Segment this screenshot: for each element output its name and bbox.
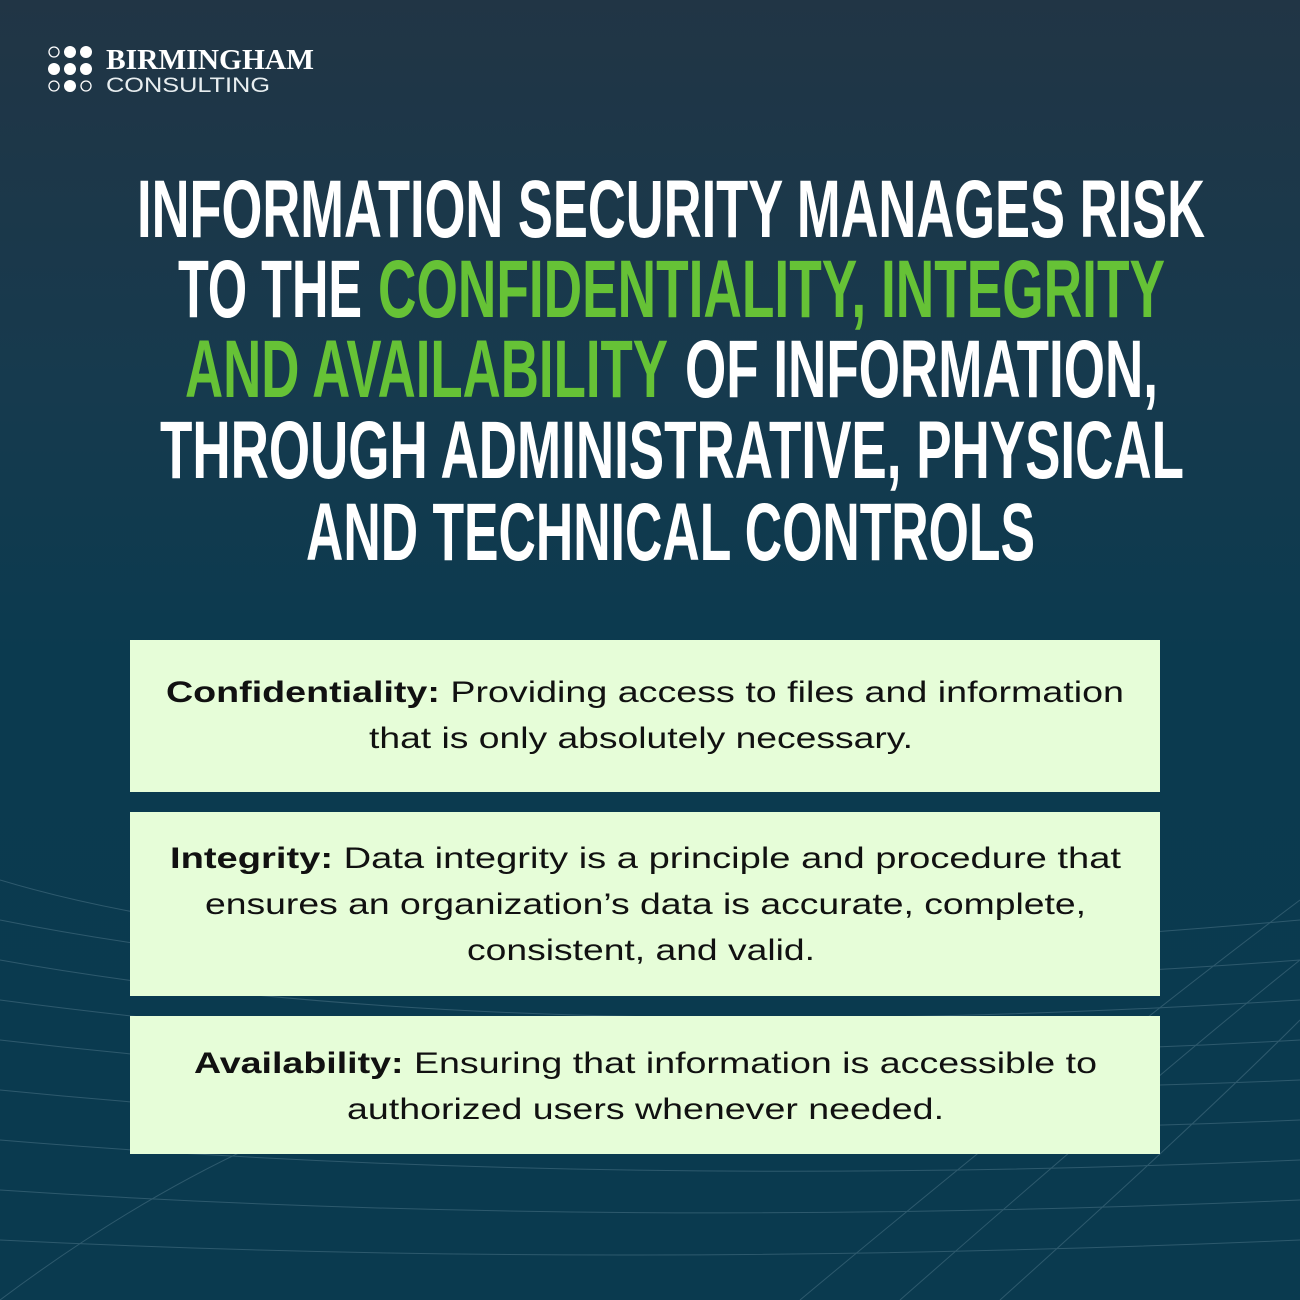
panel: integrity: Integrity: Data integrity is a principle and procedure that (170, 842, 1122, 875)
panel: confidentiality (130, 640, 1160, 792)
panel: availability: Availability: Ensuring that information is accessible to (194, 1047, 1097, 1080)
panel: integrity (130, 812, 1160, 996)
panel: availability (130, 1016, 1160, 1154)
title (137, 164, 1205, 578)
logo: CONSULTING (106, 74, 270, 97)
panel: integrity: consistent, and valid. (467, 934, 815, 967)
title: TO THE (178, 244, 362, 335)
logo (48, 45, 314, 97)
title: AND AVAILABILITY (185, 324, 668, 415)
panel: confidentiality: that is only absolutely necessary. (369, 722, 913, 755)
logo: BIRMINGHAM (106, 45, 314, 76)
panel: integrity: ensures an organization’s data is accurate, complete, (205, 888, 1086, 921)
panel: confidentiality: Confidentiality: Providing access to files and information (166, 676, 1124, 709)
panel: availability: authorized users whenever needed. (347, 1093, 944, 1126)
icon: dots (48, 46, 92, 92)
